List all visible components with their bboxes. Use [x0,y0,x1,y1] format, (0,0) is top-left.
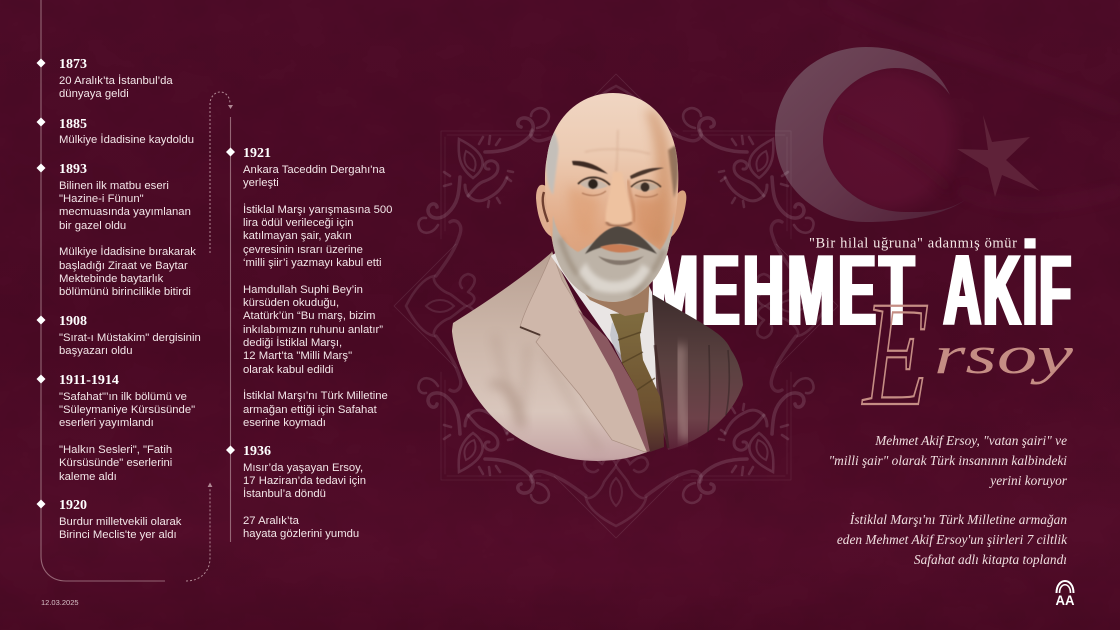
script name: Ersoy: E [861,272,929,437]
jacket right [650,293,743,450]
tie [610,312,664,452]
event 1936 [243,444,366,540]
text: 1893 [59,162,87,177]
event 1921: yerleşti [243,177,279,189]
event 1911-1914 [59,373,195,483]
event 1921: armağan ettiği için Safahat [243,404,377,416]
event 1911-1914: "Halkın Sesleri", "Fatih [59,444,172,456]
event 1908: başyazarı oldu [59,345,132,357]
event 1893: Mülkiye İdadisine bırakarak [59,246,196,258]
timeline connector: bottom dashed [186,488,210,581]
event 1893 [59,162,196,298]
right face shade [645,110,672,250]
beard [552,212,674,304]
title: Mehmet Akif [651,234,1073,348]
event 1911-1914: "Süleymaniye Kürsüsünde" [59,404,195,416]
arrow: down [228,105,233,109]
event 1921: Atatürk’ün “Bu marş, bizim [243,310,375,322]
moustache [585,226,657,254]
event 1908: "Sırat-ı Müstakim" dergisinin [59,332,201,344]
event 1920: Burdur milletvekili olarak [59,516,181,528]
text: 1921 [243,146,271,161]
event 1921: dediği İstiklal Marşı, [243,337,342,349]
event 1921: inkılabımızın ruhunu anlatır” [243,324,383,336]
event 1921: Hamdullah Suphi Bey’in [243,284,363,296]
event 1936: 17 Haziran’da tedavi için [243,475,366,487]
event 1911-1914: kaleme aldı [59,471,117,483]
event 1911-1914: Kürsüsünde" eserlerini [59,457,172,469]
timeline markers [36,58,235,508]
script name: Ersoy: rsoy [934,325,1073,385]
event 1921: lira ödül verileceği için [243,217,354,229]
timeline rail: right [230,117,232,542]
note: vatan şairi: "milli şair" olarak Türk insanının kalbindeki [829,453,1067,468]
mouth [600,244,640,253]
shirt shadow [610,322,626,363]
event 1908 [59,314,201,357]
inner crescent shade [813,60,973,220]
subtitle: "Bir hilal uğruna" adanmış ömür [809,236,1017,252]
note: Safahat: İstiklal Marşı'nı Türk Milletine armağan [850,512,1067,527]
text: 1873 [59,57,87,72]
script name: Ersoy [861,272,1073,437]
event 1873 [59,57,173,100]
event 1921: kürsüden okuduğu, [243,297,339,309]
event 1936: hayata gözlerini yumdu [243,528,359,540]
text: 1911-1914 [59,373,119,388]
note: Safahat: eden Mehmet Akif Ersoy'un şiirleri 7 ciltlik [837,532,1067,547]
neck [565,270,650,316]
event 1873: 20 Aralık’ta İstanbul’da [59,74,173,86]
event 1936: 27 Aralık’ta [243,515,299,527]
event 1893: mecmuasında yayımlanan [59,206,191,218]
note: Safahat [837,512,1068,567]
event 1893: Mektebinde baytarlık [59,273,163,285]
logo: AA: AA [1056,592,1074,608]
side hair [546,130,559,195]
date: 12.03.2025 [41,598,79,607]
event 1921: İstiklal Marşı yarışmasına 500 [243,204,392,216]
event 1893: bir gazel oldu [59,220,126,232]
forehead crease [585,130,650,172]
ornamental frame [394,74,838,538]
event 1921: katılmayan şair, yakın [243,230,352,242]
event 1921: olarak kabul edildi [243,364,333,376]
left lapel [520,252,655,452]
event 1921: İstiklal Marşı’nı Türk Milletine [243,390,388,402]
event 1885 [59,116,194,146]
note: vatan şairi: yerini koruyor [990,473,1067,488]
event 1921: 12 Mart’ta "Milli Marş" [243,350,352,362]
star [957,115,1040,197]
note: vatan şairi: Mehmet Akif Ersoy, "vatan şairi" ve [875,433,1067,448]
event 1936: Mısır’da yaşayan Ersoy, [243,462,363,474]
event 1893: bölümünü birincilikle bitirdi [59,286,191,298]
event 1921: çevresinin ısrarı üzerine [243,244,363,256]
logo: AA [1056,581,1074,608]
note: vatan şairi [829,433,1067,488]
event 1921: ‘milli şiir’i yazmayı kabul etti [243,257,382,269]
brows [572,161,608,174]
eyes [578,177,661,197]
turkish flag watermark [775,0,1120,222]
timeline connector: top dashed [210,92,230,253]
jacket left [452,252,650,461]
text: 1920 [59,498,87,513]
crescent [775,47,965,222]
title: Mehmet Akif: MEHMET [651,235,917,347]
event 1921: eserine koymadı [243,417,326,429]
event 1893: "Hazine-i Fünun" [59,193,144,205]
event 1936: İstanbul’a döndü [243,488,326,500]
text: 1908 [59,314,87,329]
timeline rail: left [41,0,165,581]
event 1893: Bilinen ilk matbu eseri [59,180,169,192]
title: Mehmet Akif: AKİF [944,234,1073,348]
event 1920: Birinci Meclis'te yer aldı [59,529,177,541]
event 1873: dünyaya geldi [59,88,129,100]
event 1921: Ankara Taceddin Dergahı'na [243,164,385,176]
note: Safahat: Safahat adlı kitapta toplandı [914,552,1067,567]
portrait [451,93,743,480]
text: 1885 [59,116,87,132]
event 1920 [59,498,182,541]
event 1893: başladığı Ziraat ve Baytar [59,260,188,272]
text: 1936 [243,444,271,459]
ears [536,185,556,237]
nose [606,172,632,225]
arrow: up [208,482,212,487]
event 1885: Mülkiye İdadisine kaydoldu [59,134,194,146]
head [545,93,678,302]
shirt [551,250,657,402]
lapel trim [578,310,660,452]
event 1911-1914: "Safahat"’ın ilk bölümü ve [59,390,187,402]
event 1911-1914: eserleri yayımlandı [59,417,154,429]
event 1921 [243,146,392,429]
